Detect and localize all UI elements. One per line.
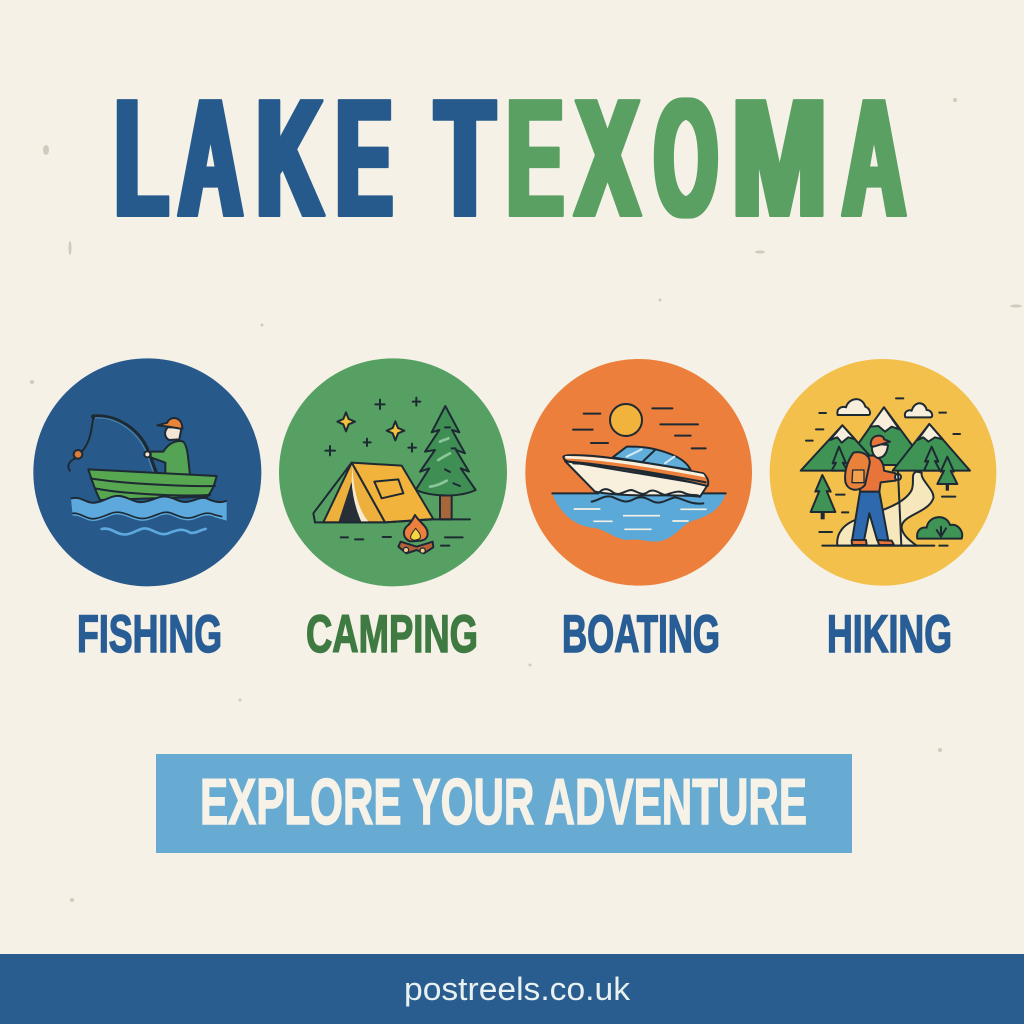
title: O	[655, 66, 717, 252]
bush	[917, 517, 962, 539]
footer bar	[0, 954, 1024, 1024]
panel: fishing icon	[33, 358, 261, 586]
ground line	[822, 543, 934, 549]
boat	[88, 469, 217, 500]
mountains	[801, 407, 970, 471]
call to action banner	[156, 754, 852, 853]
wind lines	[573, 408, 706, 448]
footer bar: postreels.co.uk	[404, 971, 631, 1007]
winding trail	[837, 472, 933, 546]
title: A	[843, 66, 905, 252]
title: L	[115, 66, 168, 252]
sky dashes	[806, 398, 960, 546]
title: M	[732, 66, 827, 252]
ground dashes	[341, 537, 463, 546]
label: hiking: HIKING	[827, 605, 952, 664]
panel: camping icon	[279, 358, 507, 586]
campfire	[398, 515, 433, 553]
label: boating: BOATING	[562, 605, 720, 664]
fishing rod and line	[68, 417, 156, 474]
bow waves	[592, 489, 703, 504]
stars	[325, 398, 420, 455]
speedboat	[563, 447, 708, 497]
title: T	[436, 66, 494, 252]
panel: boating icon	[525, 359, 752, 586]
panel: hiking icon	[770, 359, 996, 586]
title: X	[576, 66, 639, 252]
lake water	[552, 493, 726, 542]
pine tree	[416, 406, 476, 519]
title: K	[257, 66, 322, 252]
clouds	[837, 399, 932, 417]
pine trees	[811, 447, 957, 519]
title: A	[179, 66, 242, 252]
title	[115, 66, 905, 252]
fisherman	[144, 418, 190, 474]
title: E	[508, 66, 563, 252]
label: camping: CAMPING	[306, 605, 478, 664]
hiker	[845, 436, 901, 546]
tent	[313, 463, 470, 522]
water waves	[71, 496, 227, 534]
sun	[610, 404, 642, 436]
title: E	[336, 66, 392, 252]
label: fishing: FISHING	[77, 605, 222, 664]
